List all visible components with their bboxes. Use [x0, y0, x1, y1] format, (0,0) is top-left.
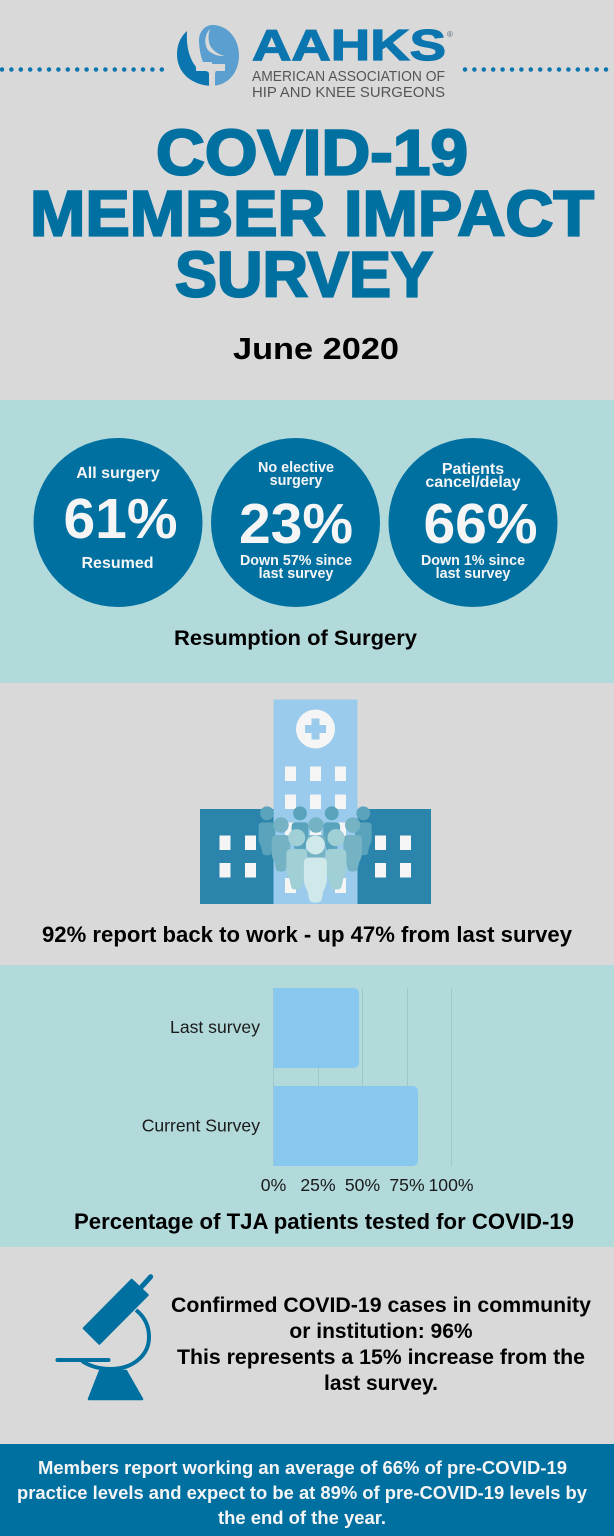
logo wordmark: AAHKS: [252, 21, 446, 70]
bar chart: [142, 988, 474, 1195]
title: SURVEY: [175, 238, 433, 310]
logo emblem: [177, 25, 239, 86]
caption: TJA testing: Percentage of TJA patients tested for COVID-19: [74, 1209, 574, 1234]
stat circle: patients cancel or delay: cancel/delay: [425, 474, 521, 491]
panel: back to work: [0, 683, 614, 965]
text: confirmed cases: Confirmed COVID-19 cases in community: [171, 1294, 591, 1317]
logo wordmark: AMERICAN ASSOCIATION OF: [252, 68, 445, 85]
heading: resumption of surgery: Resumption of Surgery: [174, 627, 417, 650]
stat circle: no elective surgery: No elective: [258, 460, 334, 476]
stat circle: all surgery: All surgery: [76, 465, 160, 482]
icon: hospital: [200, 700, 431, 904]
stat circle: patients cancel or delay: [388, 438, 558, 607]
stat circle: no elective surgery: [211, 438, 380, 607]
icon: group of staff: [259, 806, 372, 902]
logo wordmark: HIP AND KNEE SURGEONS: [252, 84, 445, 101]
text: practice levels: [17, 1457, 588, 1528]
icon: microscope: [58, 1277, 151, 1399]
title: MEMBER IMPACT: [30, 178, 594, 250]
title: COVID-19: [156, 116, 468, 188]
axis labels: 0%: [261, 1175, 287, 1195]
text: practice levels: practice levels and expect to be at 89% of pre-COVID-19 levels by: [17, 1482, 588, 1503]
panel: header: [0, 0, 614, 400]
axis labels: 25%: [300, 1175, 336, 1195]
date: June 2020: [233, 331, 399, 366]
panel: TJA testing chart: [0, 965, 614, 1247]
dotted line: left: [2, 67, 166, 72]
bar: current survey: [274, 1086, 418, 1166]
stat circle: no elective surgery: last survey: [259, 566, 333, 582]
stat circle: patients cancel or delay: last survey: [436, 566, 510, 582]
stat circle: no elective surgery: surgery: [270, 473, 322, 489]
category labels: Last survey: [170, 1017, 260, 1037]
title: [30, 116, 594, 310]
text: confirmed cases: or institution: 96%: [289, 1320, 473, 1343]
text: confirmed cases: [171, 1294, 591, 1395]
axis labels: 100%: [428, 1175, 474, 1195]
text: confirmed cases: This represents a 15% increase from the: [177, 1346, 585, 1369]
axis labels: 50%: [345, 1175, 380, 1195]
stat circle: no elective surgery: 23%: [239, 492, 353, 556]
bar: last survey: [274, 988, 359, 1068]
text: practice levels: the end of the year.: [218, 1507, 386, 1528]
stat circle: patients cancel or delay: Patients: [442, 461, 504, 478]
stat circle: all surgery: 61%: [63, 487, 178, 551]
category labels: Current Survey: [142, 1116, 260, 1136]
panel: resumption of surgery: [0, 400, 614, 683]
stat circle: no elective surgery: Down 57% since: [240, 553, 352, 569]
axis labels: [261, 1175, 474, 1195]
panel: confirmed cases: [0, 1247, 614, 1444]
caption: back to work: 92% report back to work - up 47% from last survey: [42, 922, 573, 947]
logo wordmark: [252, 21, 453, 101]
logo wordmark: ®: [447, 30, 453, 39]
category labels: [142, 1017, 260, 1136]
text: practice levels: Members report working an average of 66% of pre-COVID-19: [38, 1457, 567, 1478]
stat circle: patients cancel or delay: Down 1% since: [421, 553, 525, 569]
axis labels: 75%: [389, 1175, 425, 1195]
stat circle: all surgery: Resumed: [81, 555, 154, 572]
text: confirmed cases: last survey.: [324, 1372, 438, 1395]
dotted line: right: [465, 67, 610, 72]
stat circle: all surgery: [34, 438, 202, 607]
stat circle: patients cancel or delay: 66%: [423, 492, 538, 556]
panel: footer: [0, 1444, 614, 1536]
